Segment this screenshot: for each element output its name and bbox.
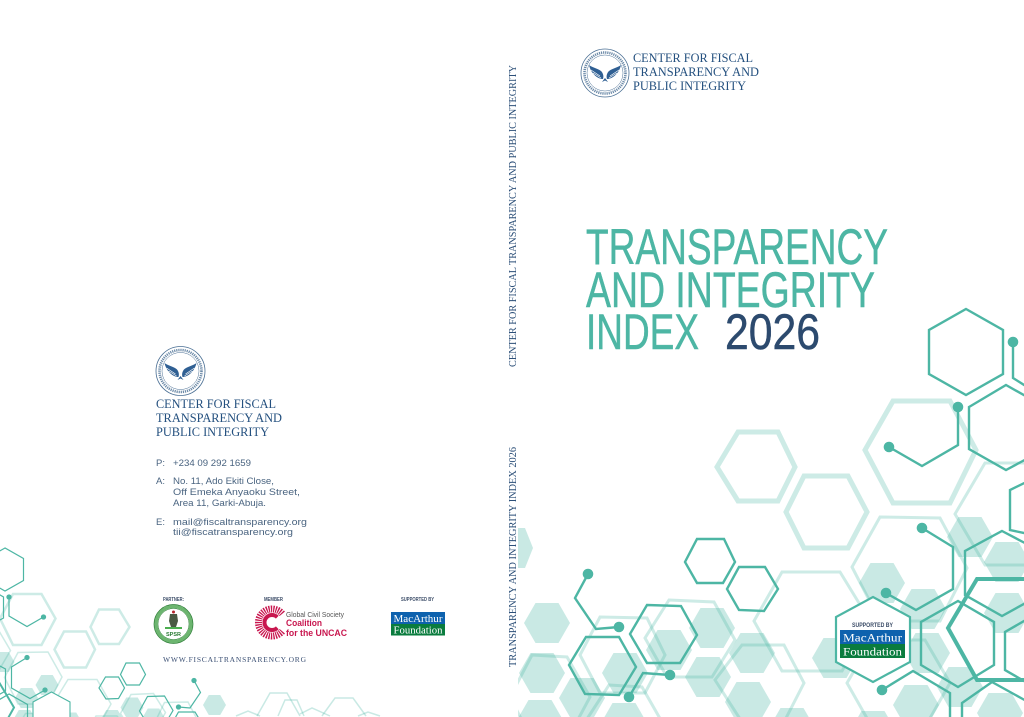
contact details — [156, 458, 307, 538]
contact details: +234 09 292 1659 — [173, 458, 251, 469]
contact details: A: — [156, 476, 165, 487]
main title: INDEX — [586, 304, 699, 360]
badge: supported by MacArthur Foundation: Foundation — [843, 646, 902, 658]
partner logo: SPSR seal: SPSR — [166, 632, 181, 638]
contact details: P: — [156, 458, 165, 469]
main title — [586, 219, 888, 360]
contact details: E: — [156, 517, 165, 528]
partner logo: SPSR seal: PARTNER: — [163, 597, 184, 603]
back cover logo: Center for Fiscal Transparency — [156, 346, 205, 396]
supporter logo: MacArthur Foundation (back) — [391, 597, 445, 636]
member logo: Coalition for the UNCAC — [258, 597, 347, 638]
member logo: Coalition for the UNCAC: for the UNCAC — [286, 628, 347, 638]
main title: 2026 — [725, 304, 820, 360]
back cover organisation name: PUBLIC INTEGRITY — [156, 425, 269, 439]
contact details: tii@fiscatransparency.org — [173, 527, 293, 538]
member logo: Coalition for the UNCAC: Coalition — [286, 618, 322, 628]
supporter logo: MacArthur Foundation (back): MacArthur — [394, 614, 443, 625]
main title: AND INTEGRITY — [586, 262, 875, 318]
supporter logo: MacArthur Foundation (back): SUPPORTED BY — [401, 597, 435, 603]
contact details: Area 11, Garki-Abuja. — [173, 498, 266, 509]
front cover organisation name: CENTER FOR FISCAL — [633, 51, 753, 65]
badge: supported by MacArthur Foundation — [840, 623, 905, 658]
contact details: mail@fiscaltransparency.org — [173, 517, 307, 528]
partner logo: SPSR seal — [154, 597, 193, 644]
badge: supported by MacArthur Foundation: MacArthur — [843, 632, 902, 644]
badge: supported by MacArthur Foundation: SUPPORTED BY — [852, 623, 893, 629]
member logo: Coalition for the UNCAC: MEMBER — [264, 597, 283, 603]
front cover hexagon artwork — [510, 309, 1024, 717]
website: WWW.FISCALTRANSPARENCY.ORG — [163, 655, 307, 664]
front cover organisation name: PUBLIC INTEGRITY — [633, 79, 746, 93]
spine: organisation name: CENTER FOR FISCAL TRANSPARENCY AND PUBLIC INTEGRITY — [508, 65, 519, 367]
front cover logo: Center for Fiscal Transparency — [581, 49, 629, 97]
supporter logo: MacArthur Foundation (back): Foundation — [394, 626, 442, 636]
contact details: Off Emeka Anyaoku Street, — [173, 487, 300, 498]
contact details: No. 11, Ado Ekiti Close, — [173, 476, 274, 487]
front cover organisation name: TRANSPARENCY AND — [633, 65, 759, 79]
member logo: Coalition for the UNCAC: Global Civil Society — [286, 612, 344, 619]
spine: report title: TRANSPARENCY AND INTEGRITY INDEX 2026 — [508, 447, 519, 667]
main title: TRANSPARENCY — [586, 219, 888, 275]
back cover organisation name: CENTER FOR FISCAL — [156, 397, 276, 411]
front cover organisation name — [633, 51, 759, 93]
back cover organisation name: TRANSPARENCY AND — [156, 411, 282, 425]
back cover organisation name — [156, 397, 282, 439]
back cover hexagon artwork — [0, 548, 380, 717]
